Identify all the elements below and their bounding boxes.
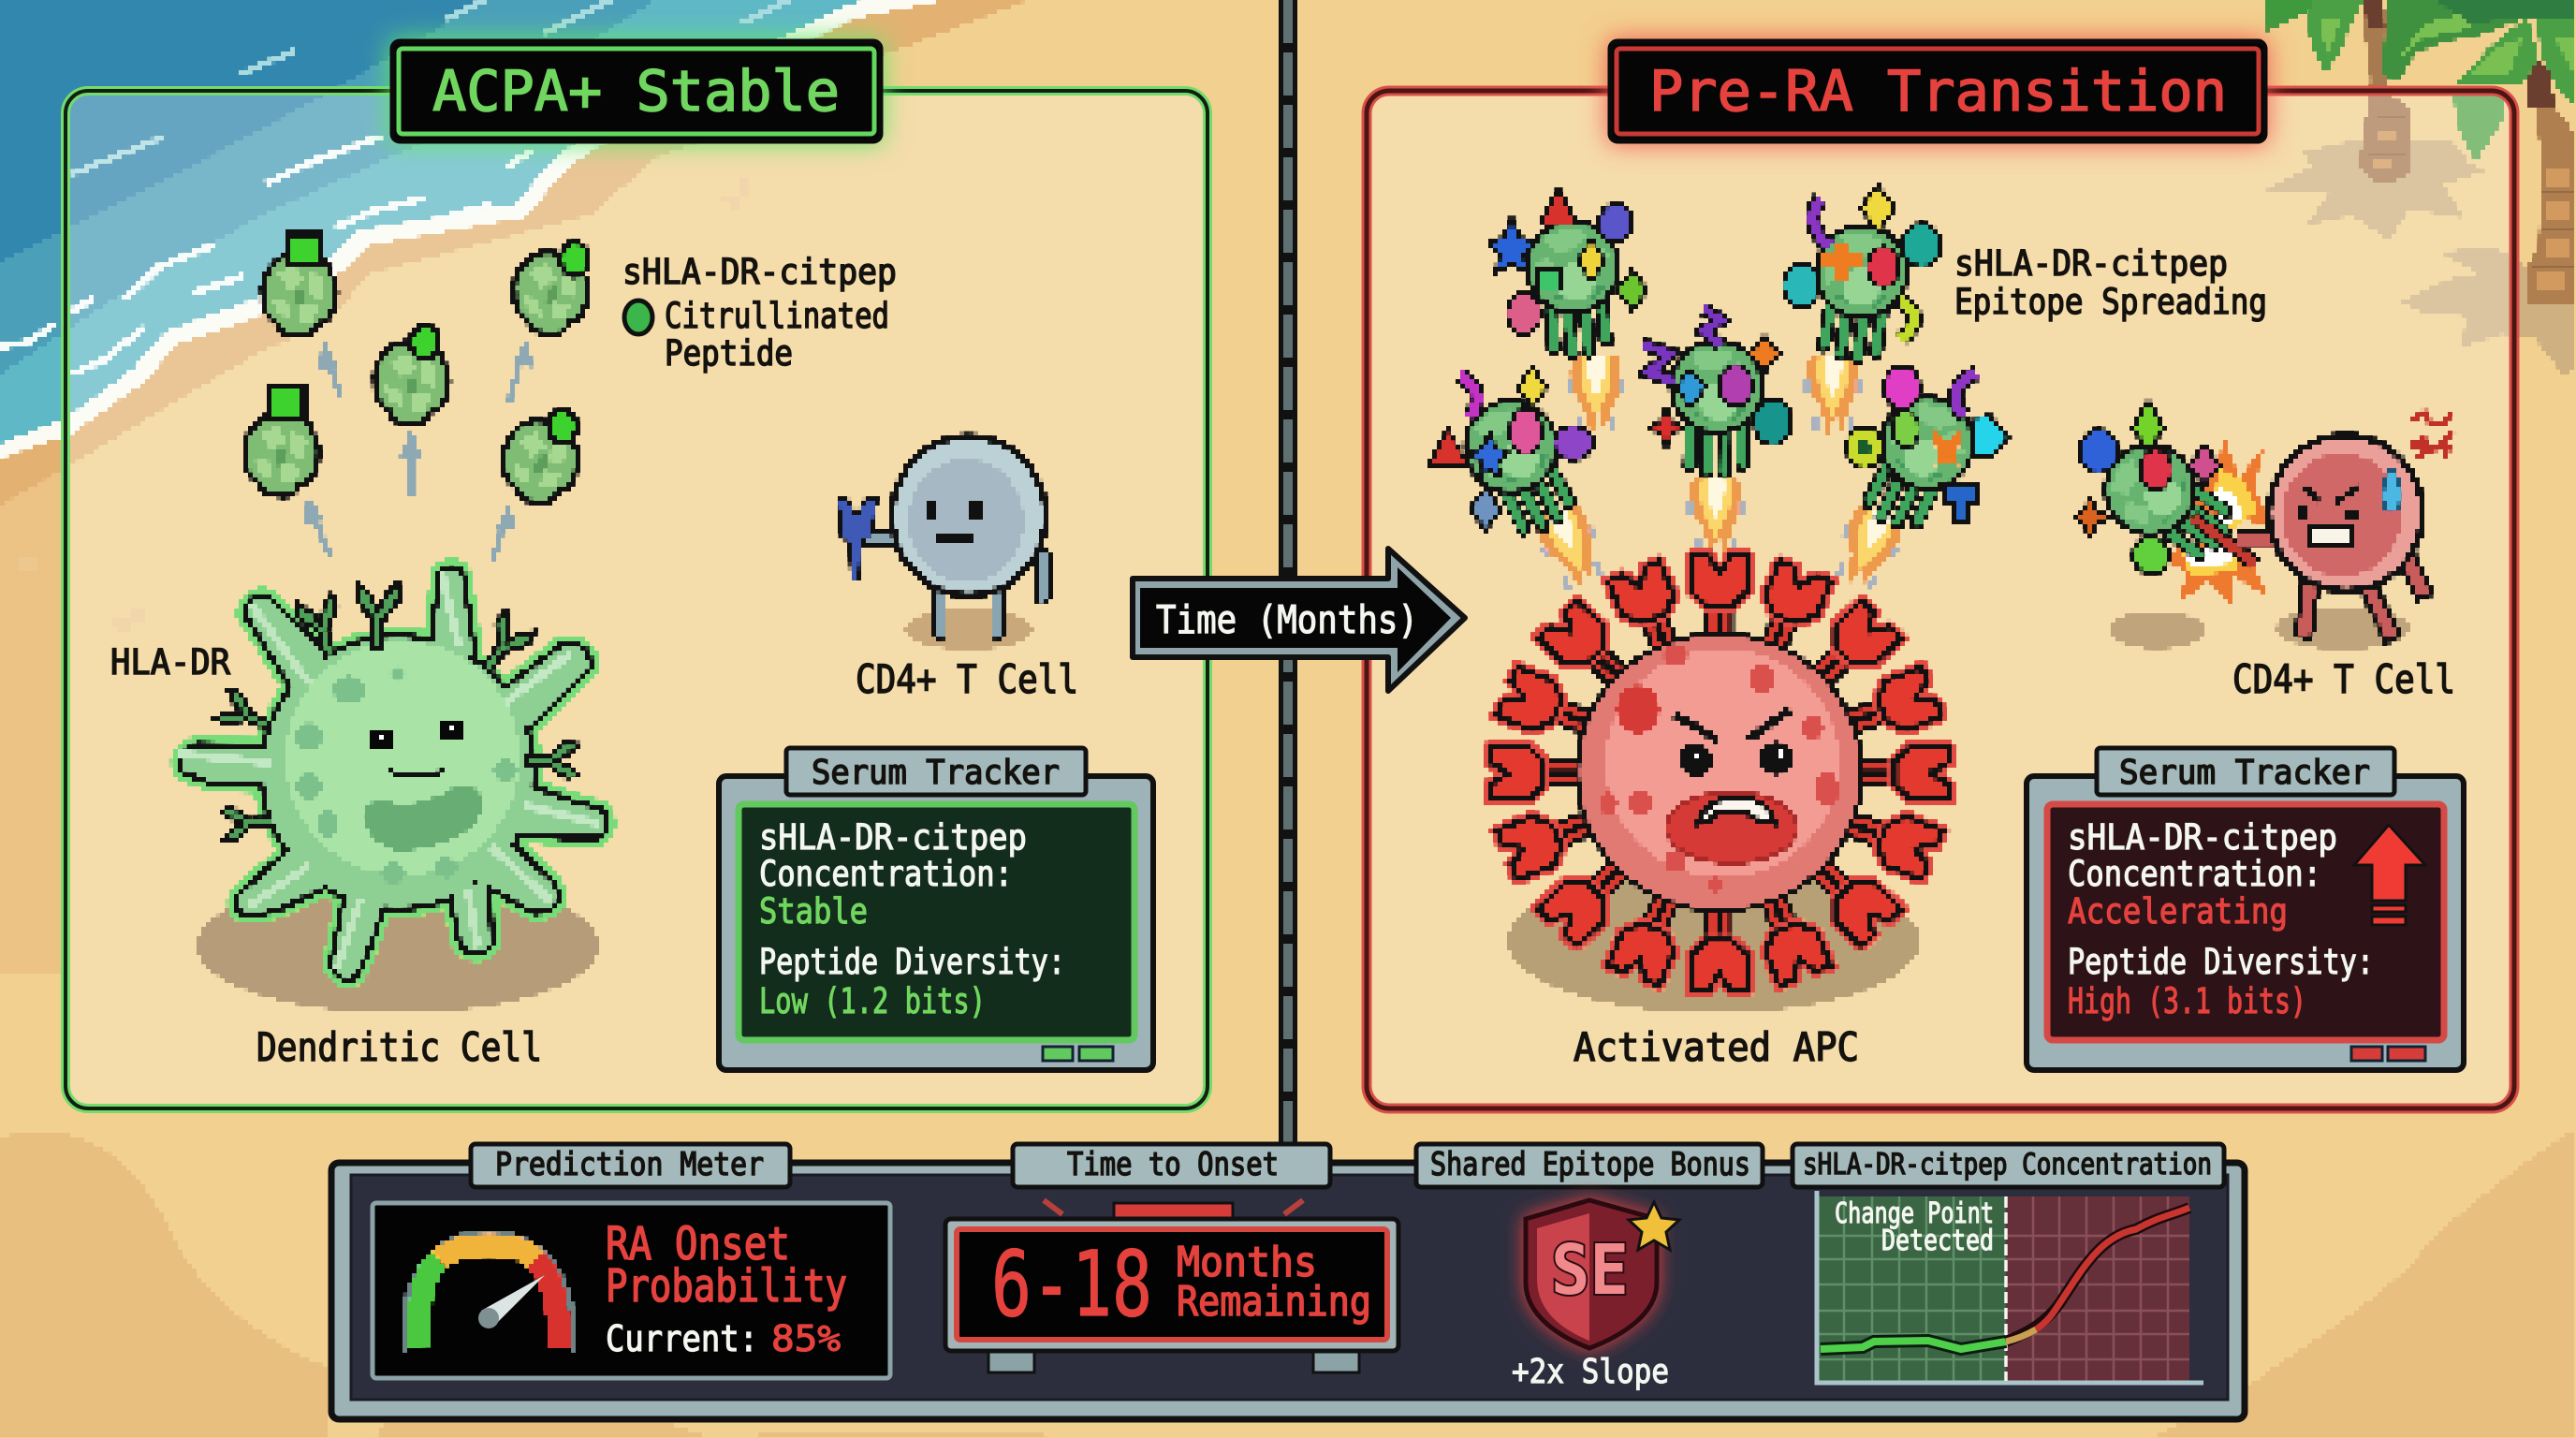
- shared epitope shield: SE: [1551, 1230, 1629, 1311]
- palm shadows: [2267, 139, 2576, 376]
- panel: Serum Tracker stable: Serum Tracker: [812, 754, 1060, 792]
- time to onset clock: Months: [1177, 1239, 1317, 1286]
- panel: Serum Tracker stable: Concentration:: [759, 854, 1013, 894]
- panel: Serum Tracker accelerating: [2027, 748, 2464, 1070]
- label: CD4+ T Cell left: CD4+ T Cell: [856, 656, 1078, 702]
- molecule 1: [1488, 189, 1647, 437]
- time to onset clock: [945, 1200, 1398, 1372]
- concentration chart: Change Point: [1835, 1197, 1994, 1230]
- panel: Serum Tracker accelerating: Accelerating: [2068, 891, 2288, 932]
- arrow: Time (Months): Time (Months): [1156, 597, 1418, 642]
- icon: T cell attacking molecule: [2074, 401, 2454, 650]
- prediction meter: RA Onset: [606, 1218, 790, 1270]
- panel: Serum Tracker accelerating: High (3.1 bits): [2068, 981, 2306, 1021]
- label: sHLA-DR-citpep legend: Peptide: [665, 333, 793, 374]
- panel: Serum Tracker accelerating: sHLA-DR-citpep: [2068, 817, 2337, 858]
- tab: Prediction Meter: Prediction Meter: [495, 1146, 764, 1183]
- title: ACPA+ Stable: [390, 39, 883, 143]
- prediction meter: Current:: [606, 1318, 758, 1359]
- prediction meter: Probability: [606, 1260, 847, 1313]
- tab: Time to Onset: Time to Onset: [1067, 1146, 1279, 1183]
- panel: ACPA+ Stable: [66, 91, 1208, 1108]
- label: sHLA-DR-citpep legend: Citrullinated: [665, 296, 889, 336]
- icon: up arrow: [2354, 825, 2425, 925]
- panel: Serum Tracker stable: Stable: [759, 891, 868, 932]
- molecule 5: [1828, 366, 2009, 598]
- concentration chart: [1817, 1191, 2203, 1383]
- label: Dendritic Cell: Dendritic Cell: [256, 1024, 542, 1070]
- tab: sHLA-DR-citpep Concentration: [1793, 1144, 2224, 1187]
- title: Pre-RA Transition: Pre-RA Transition: [1649, 59, 2227, 125]
- concentration chart: Detected: [1881, 1225, 1994, 1257]
- molecule: round peptide 2: [374, 326, 448, 424]
- panel: Serum Tracker stable: sHLA-DR-citpep: [759, 817, 1027, 858]
- label: Activated APC: Activated APC: [1573, 1024, 1859, 1070]
- arrow: Time (Months): [1133, 549, 1465, 691]
- tab: sHLA-DR-citpep Concentration: sHLA-DR-citpep Concentration: [1803, 1148, 2212, 1181]
- title: ACPA+ Stable: ACPA+ Stable: [432, 59, 840, 125]
- gauge needle: [478, 1275, 545, 1328]
- prediction meter: [373, 1203, 890, 1378]
- soluble peptide complexes released by dendritic cell: [244, 234, 589, 503]
- shared epitope shield: [1512, 1198, 1679, 1391]
- panel: Serum Tracker stable: Low (1.2 bits): [759, 981, 986, 1021]
- time to onset clock: Remaining: [1177, 1278, 1371, 1326]
- panel: Serum Tracker stable: Peptide Diversity:: [759, 942, 1065, 982]
- shared epitope shield: +2x Slope: [1512, 1353, 1669, 1391]
- molecule 2: [1783, 185, 1940, 437]
- star: [1629, 1202, 1679, 1250]
- panel: Serum Tracker stable: [719, 748, 1153, 1070]
- icon: activated APC: [1490, 555, 1949, 1013]
- panel: Serum Tracker accelerating: Serum Tracker: [2119, 754, 2370, 792]
- gauge: [403, 1232, 573, 1353]
- panel: Serum Tracker accelerating: Concentration:: [2068, 854, 2321, 894]
- panel: Serum Tracker accelerating: Peptide Diversity:: [2068, 942, 2374, 982]
- prediction meter: 85%: [771, 1318, 841, 1359]
- label: epitope spreading: sHLA-DR-citpep: [1954, 243, 2228, 284]
- tab: Time to Onset: [1013, 1144, 1330, 1187]
- title: Pre-RA Transition: [1608, 39, 2267, 143]
- sand speckles: [19, 180, 751, 633]
- icon: dendritic cell: [178, 569, 605, 1013]
- molecule: square peptide 4: [244, 388, 318, 496]
- label: epitope spreading: [1954, 243, 2267, 322]
- molecule: square peptide 1: [262, 234, 336, 336]
- label: epitope spreading: Epitope Spreading: [1954, 282, 2267, 322]
- palm trees: [2265, 0, 2576, 304]
- epitope-spreading molecules with jets: [1428, 185, 2009, 598]
- tab: Shared Epitope Bonus: Shared Epitope Bonus: [1430, 1146, 1750, 1183]
- release arrows: [304, 340, 534, 562]
- icon: stable CD4+ T cell: [838, 436, 1046, 650]
- molecule 3: [1643, 309, 1792, 559]
- time to onset clock: 6-18: [991, 1232, 1152, 1337]
- molecule: round peptide 5: [504, 410, 578, 503]
- centre divider chain: [1279, 0, 1297, 1146]
- panel: Pre-RA Transition: [1367, 91, 2514, 1108]
- label: sHLA-DR-citpep legend: sHLA-DR-citpep: [622, 252, 897, 292]
- molecule 4: [1428, 367, 1611, 598]
- label: sHLA-DR-citpep legend: [622, 252, 897, 374]
- label: CD4+ T Cell right: CD4+ T Cell: [2232, 656, 2455, 702]
- panel: bottom dashboard: [331, 1144, 2245, 1419]
- label: HLA-DR: HLA-DR: [110, 642, 231, 682]
- molecule: round peptide 3: [514, 242, 589, 334]
